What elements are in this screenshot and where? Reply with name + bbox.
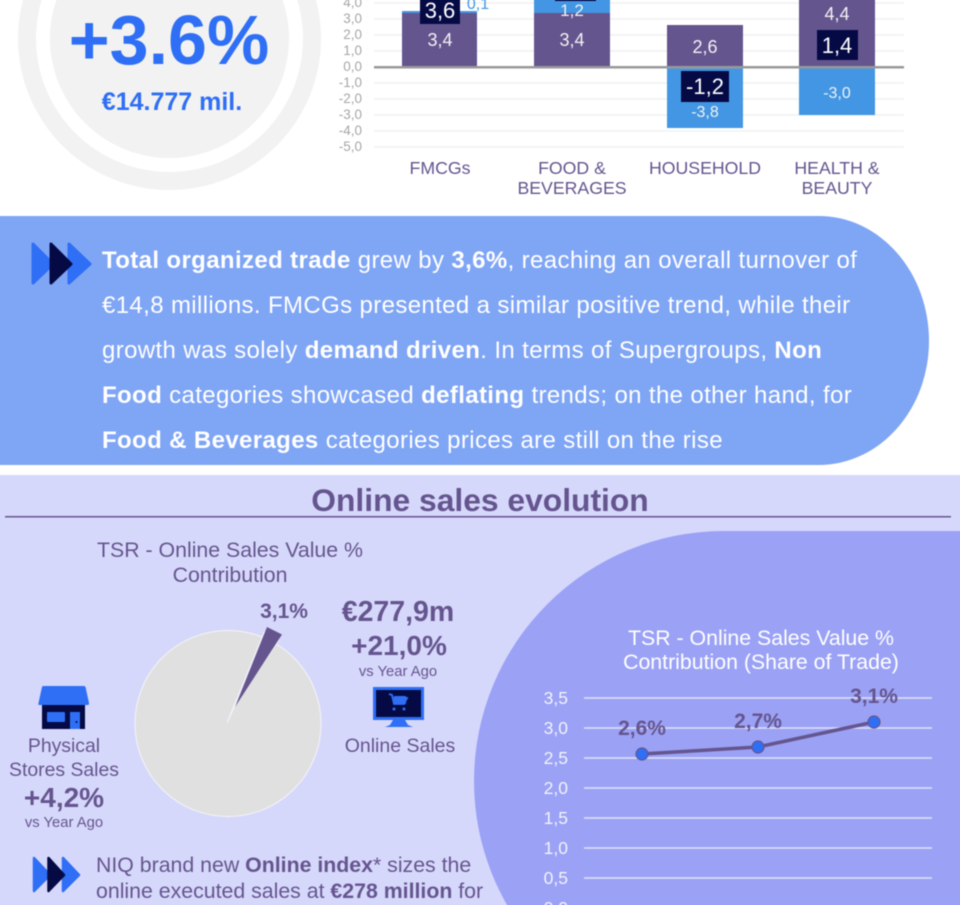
line chart y axis: 1,5 bbox=[544, 808, 568, 828]
online sales figures bbox=[342, 596, 454, 680]
online index text: online executed sales at €278 million for bbox=[96, 879, 483, 903]
category labels: BEAUTY bbox=[802, 178, 873, 198]
bars bbox=[402, 0, 875, 128]
y axis labels: 2,0 bbox=[343, 27, 362, 42]
category labels bbox=[410, 158, 880, 198]
callout text: Food & Beverages categories prices are still on the rise bbox=[102, 427, 723, 454]
y axis labels: 1,0 bbox=[343, 43, 362, 58]
y axis labels: -4,0 bbox=[339, 123, 362, 138]
bar value labels: 3,4 bbox=[559, 30, 585, 50]
line chart title: TSR - Online Sales Value % bbox=[628, 626, 894, 650]
physical stores figures bbox=[9, 735, 119, 831]
pie label: 3,1% bbox=[260, 600, 308, 623]
bar value labels: 1,2 bbox=[560, 1, 584, 20]
y axis labels: -1,0 bbox=[339, 75, 362, 90]
bar value labels: 4,4 bbox=[824, 4, 850, 24]
line chart title bbox=[623, 626, 899, 674]
line chart y axis: 1,0 bbox=[544, 838, 568, 858]
online sales label: Online Sales bbox=[345, 735, 456, 757]
pie chart bbox=[135, 600, 321, 816]
line chart y axis: 3,5 bbox=[544, 688, 568, 708]
category labels: HOUSEHOLD bbox=[649, 158, 761, 178]
KPI value: +3.6% bbox=[69, 1, 269, 79]
bar value labels: 1,4 bbox=[822, 33, 852, 58]
line chart: share of trade bbox=[544, 626, 932, 905]
callout text: Total organized trade grew by 3,6%, reaching an overall turnover of bbox=[102, 247, 857, 274]
bar value labels: -1,2 bbox=[686, 74, 724, 99]
data line bbox=[642, 722, 874, 754]
data points bbox=[636, 716, 880, 760]
line chart title: Contribution (Share of Trade) bbox=[623, 650, 899, 674]
y axis labels: -5,0 bbox=[339, 139, 362, 154]
physical stores figures: vs Year Ago bbox=[25, 815, 103, 831]
line chart y axis: 2,5 bbox=[544, 748, 568, 768]
y axis labels: -3,0 bbox=[339, 107, 362, 122]
line chart y axis: 0,5 bbox=[544, 868, 568, 888]
physical stores figures: Stores Sales bbox=[9, 759, 119, 781]
y axis labels: -2,0 bbox=[339, 91, 362, 106]
bar value labels: 3,4 bbox=[427, 30, 453, 50]
line chart y axis: 2,0 bbox=[544, 778, 568, 798]
y axis labels: 0,0 bbox=[343, 59, 362, 74]
category labels: BEVERAGES bbox=[517, 178, 627, 198]
panel: line chart background bbox=[474, 531, 960, 905]
data labels: 3,1% bbox=[850, 685, 898, 708]
bar value labels: -3,0 bbox=[823, 85, 851, 102]
zero axis bbox=[374, 66, 904, 68]
icon: triple chevron bbox=[34, 858, 79, 891]
category labels: FOOD & bbox=[538, 158, 606, 178]
callout text: Food categories showcased deflating trends; on the other hand, for bbox=[102, 382, 852, 409]
bar value labels bbox=[425, 0, 852, 121]
data labels: 2,7% bbox=[734, 710, 782, 733]
icon: monitor with cart bbox=[373, 687, 424, 727]
icon: store bbox=[38, 686, 89, 729]
data labels: 2,6% bbox=[618, 717, 666, 740]
bar chart: growth decomposition by supergroup bbox=[339, 0, 904, 198]
bar value labels: 2,6 bbox=[692, 37, 718, 57]
line chart y axis bbox=[544, 688, 568, 905]
physical stores figures: +4,2% bbox=[24, 782, 104, 813]
online index text: NIQ brand new Online index* sizes the bbox=[96, 853, 471, 877]
KPI circle: total growth bbox=[18, 0, 321, 190]
pie chart title bbox=[97, 538, 363, 587]
panel: summary callout bbox=[0, 216, 929, 465]
online sales figures: +21,0% bbox=[351, 630, 447, 661]
pie chart title: TSR - Online Sales Value % bbox=[97, 538, 363, 562]
callout text: €14,8 millions. FMCGs presented a similar positive trend, while their bbox=[102, 292, 850, 319]
icon: triple chevron bbox=[33, 244, 90, 283]
heading: Online sales evolution bbox=[311, 482, 649, 518]
bar value labels: -3,8 bbox=[691, 104, 719, 121]
panel: online sales evolution bbox=[0, 475, 960, 905]
y axis labels bbox=[339, 0, 362, 154]
category labels: HEALTH & bbox=[794, 158, 880, 178]
online sales figures: vs Year Ago bbox=[359, 664, 437, 680]
line chart y axis: 3,0 bbox=[544, 718, 568, 738]
total value boxes bbox=[420, 0, 858, 102]
pie chart title: Contribution bbox=[173, 563, 287, 587]
callout text: growth was solely demand driven. In terms of Supergroups, Non bbox=[102, 337, 822, 364]
category labels: FMCGs bbox=[410, 158, 471, 178]
physical stores figures: Physical bbox=[28, 735, 100, 757]
y axis labels: 3,0 bbox=[343, 11, 362, 26]
online sales figures: €277,9m bbox=[342, 596, 454, 628]
KPI turnover: €14.777 mil. bbox=[102, 88, 242, 116]
callout text bbox=[102, 247, 857, 454]
online index text bbox=[96, 853, 483, 903]
data labels bbox=[618, 685, 898, 740]
